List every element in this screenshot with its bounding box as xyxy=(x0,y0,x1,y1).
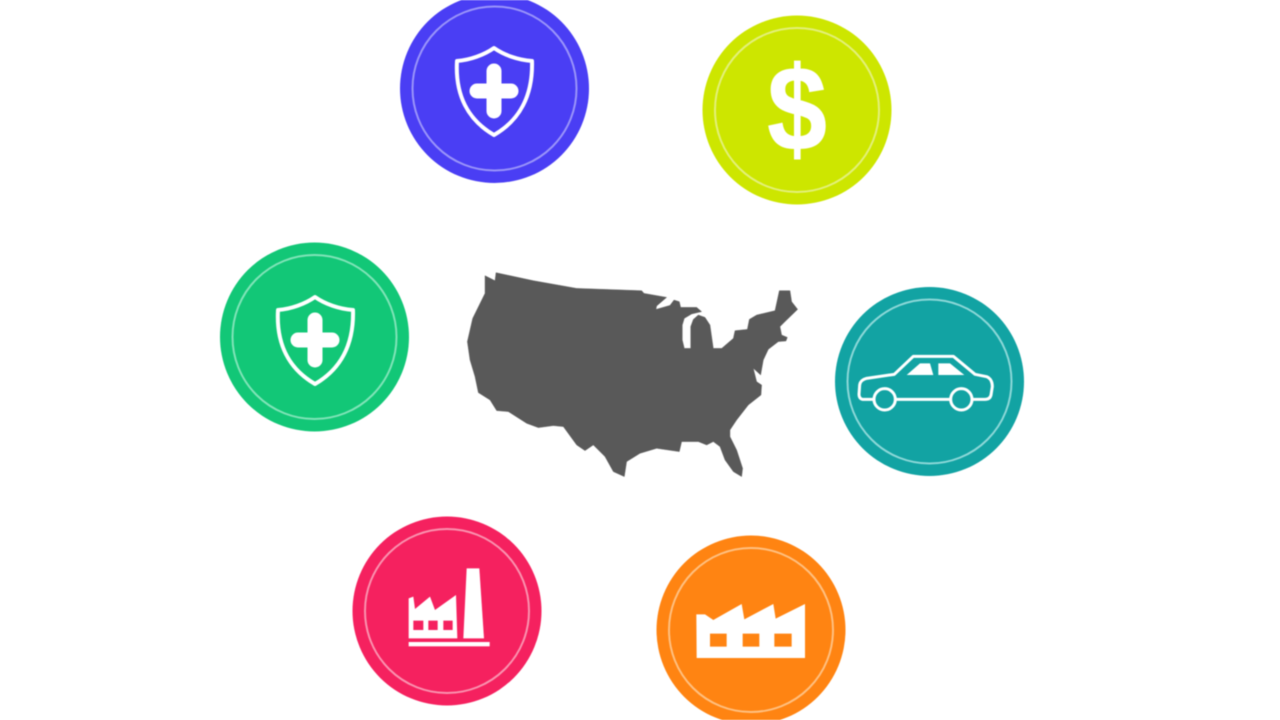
badge: orange factory xyxy=(656,536,846,720)
badge: pink factory with chimney xyxy=(352,516,542,706)
badge: teal car xyxy=(835,287,1024,476)
icon: factory with chimney xyxy=(409,568,490,646)
badge: lime dollar xyxy=(702,16,892,204)
icon: factory xyxy=(696,604,805,658)
icon: shield with cross xyxy=(278,297,353,384)
badge: blue shield xyxy=(400,0,589,183)
icon: dollar sign: $ xyxy=(767,42,827,176)
map: contiguous United States xyxy=(467,273,798,477)
icon: car xyxy=(859,356,992,410)
badge: green shield xyxy=(220,242,409,432)
icon: shield with cross xyxy=(457,48,532,135)
